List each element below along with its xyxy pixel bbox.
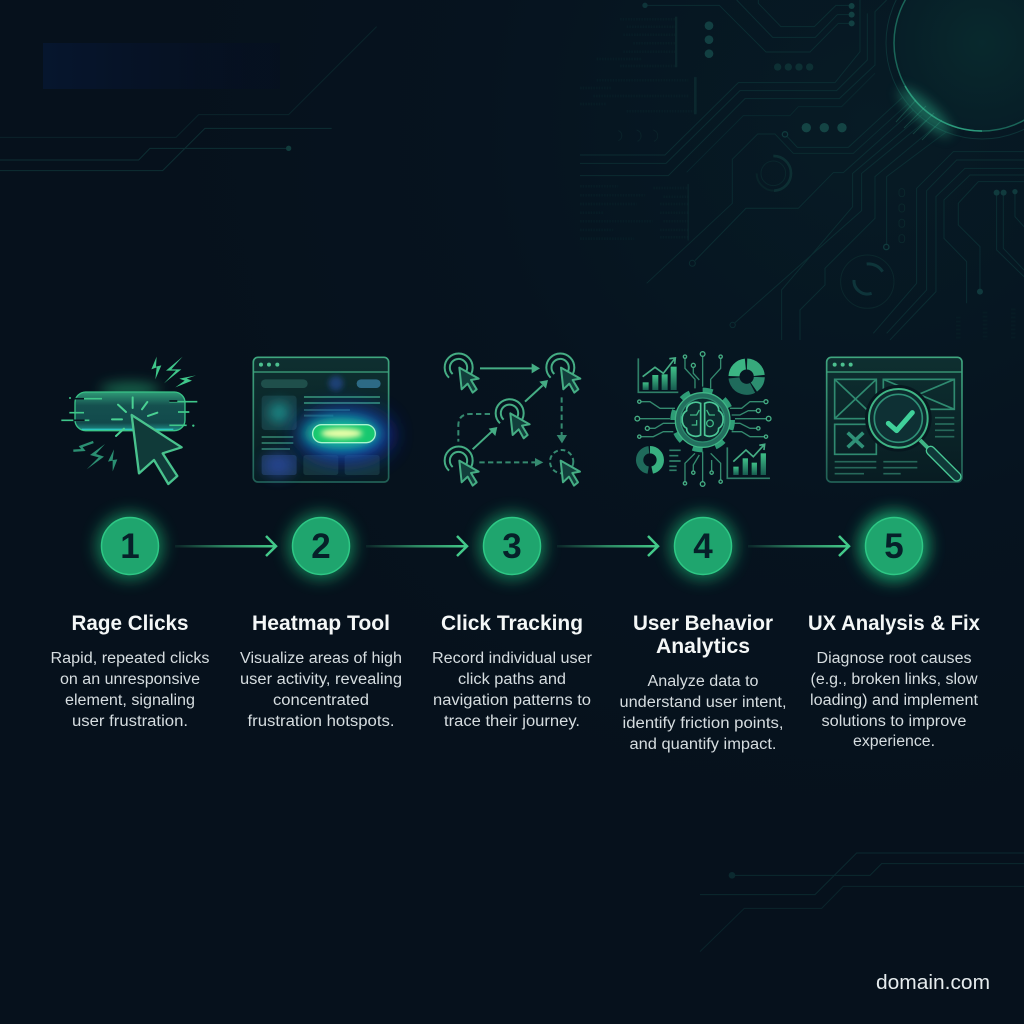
circuit board decoration: top right (580, 0, 1024, 340)
step 3 icon: click tracking (445, 354, 580, 486)
step 4 text (620, 612, 786, 753)
step 1 text: element, signaling (65, 692, 195, 709)
step 1 text: Rapid, repeated clicks (50, 650, 210, 667)
arrow 2 to 3 (366, 536, 467, 556)
step 3 text: Click Tracking (441, 612, 583, 635)
circuit lines: top left (0, 27, 377, 171)
step 3 text: Record individual user (432, 650, 592, 667)
step 2 text: concentrated (273, 692, 369, 709)
step 5 text: (e.g., broken links, slow (810, 671, 978, 688)
step 2 icon: heatmap tool (253, 357, 390, 482)
step 4 text: User Behavior (633, 612, 773, 635)
step 1 text (50, 612, 210, 730)
step 3 text: click paths and (458, 671, 566, 688)
step 5 text: Diagnose root causes (816, 650, 972, 667)
step 1 text: on an unresponsive (60, 671, 200, 688)
step 4 text: identify friction points, (622, 715, 784, 732)
donut bottom left (638, 448, 662, 472)
footer domain: domain.com (876, 972, 990, 994)
step 5 icon: ux analysis and fix (827, 357, 962, 482)
blue placeholder band (43, 43, 280, 89)
step 3 text: trace their journey. (444, 713, 580, 730)
step circle 5 (859, 511, 929, 581)
step circle 3 (479, 513, 545, 579)
step 5 text (808, 612, 980, 750)
arrow 1 to 2 (175, 536, 276, 556)
step 5 text: loading) and implement (810, 692, 979, 709)
step 4 text: and quantify impact. (630, 736, 776, 753)
step 3 text (432, 612, 592, 730)
circuit lines: bottom right (700, 853, 1024, 952)
step 2 text: Heatmap Tool (252, 612, 390, 635)
step circle 4 (670, 513, 736, 579)
step 1 icon: rage clicks (61, 357, 197, 484)
step circle 2: 2 (311, 527, 331, 566)
step circle 3: 3 (502, 527, 522, 566)
gear with brain (673, 391, 732, 449)
step 5 text: solutions to improve (822, 713, 966, 730)
glowing disc (886, 0, 1024, 141)
step 1 text: user frustration. (72, 713, 188, 730)
process flow (97, 511, 929, 581)
step circle 1 (97, 513, 163, 579)
step 4 text: understand user intent, (620, 694, 786, 711)
arrow 3 to 4 (557, 536, 658, 556)
step 2 text: frustration hotspots. (248, 713, 394, 730)
chart top left (638, 358, 678, 392)
step 4 text: Analytics (656, 635, 750, 658)
step 3 text: navigation patterns to (433, 692, 591, 709)
arrow 4 to 5 (748, 536, 849, 556)
step 5 text: UX Analysis & Fix (808, 612, 980, 635)
circuit traces (638, 355, 768, 483)
step 2 text: Visualize areas of high (240, 650, 402, 667)
step 4 icon: user behavior analytics (635, 352, 771, 486)
step circle 5: 5 (884, 527, 904, 566)
step circle 4: 4 (693, 527, 713, 566)
step circle 1: 1 (120, 527, 140, 566)
pie top right (730, 360, 764, 394)
step circle 2 (288, 513, 354, 579)
step 2 text: user activity, revealing (240, 671, 402, 688)
step 1 text: Rage Clicks (72, 612, 188, 635)
step 2 text (240, 612, 402, 730)
chart bottom right (727, 444, 770, 478)
step 4 text: Analyze data to (648, 673, 758, 690)
step 5 text: experience. (853, 733, 935, 750)
